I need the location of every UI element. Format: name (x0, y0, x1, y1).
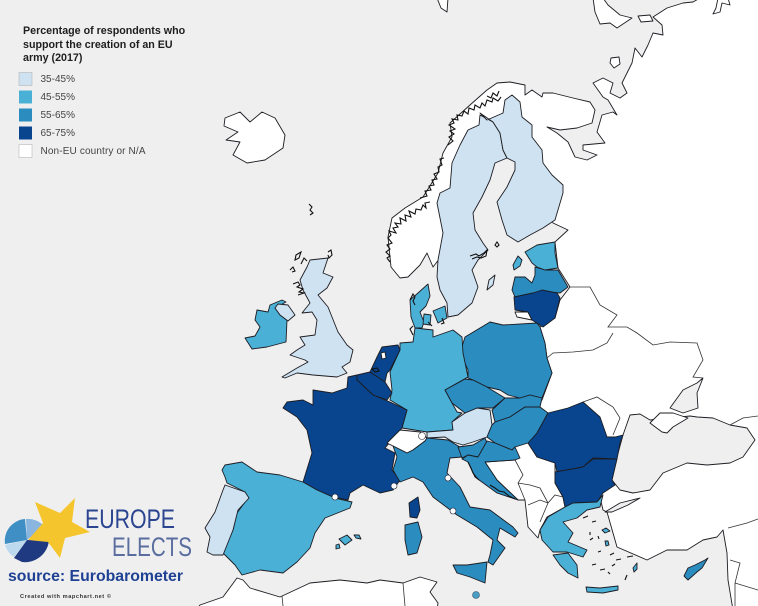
Sardinia (405, 522, 422, 555)
Cyprus (684, 558, 708, 580)
legend title: support the creation of an EU (23, 39, 173, 51)
legend swatch non-EU: Non-EU country or N/A (40, 146, 146, 157)
Poland (460, 322, 552, 398)
Spain (222, 462, 352, 575)
Greece (540, 495, 603, 557)
Gotland (487, 275, 495, 290)
Crete (586, 586, 618, 593)
France (283, 375, 407, 500)
Austria (427, 408, 492, 445)
logo pie chart (5, 519, 49, 562)
Sea of Marmara (605, 498, 640, 512)
Iceland (224, 112, 285, 163)
North Africa (196, 577, 438, 606)
Netherlands (370, 345, 400, 382)
legend swatch 45-55% (19, 90, 75, 104)
Hungary (487, 407, 548, 450)
Faroe and Shetland islands (309, 204, 332, 258)
Sicily (453, 562, 487, 583)
Germany (390, 328, 468, 432)
Kaliningrad (515, 312, 532, 320)
Estonian island (513, 256, 522, 270)
Romania (528, 402, 623, 472)
Finland (480, 95, 563, 242)
Europe Elects logo (5, 498, 192, 562)
Balkan borders (515, 460, 563, 522)
non-EU land: Norway, Russia, Belarus, Ukraine, Turkey (388, 0, 758, 606)
legend swatch 35-45%: 35-45% (40, 74, 75, 85)
Balearic Islands (336, 535, 361, 549)
Latvia (512, 267, 568, 297)
legend swatch 65-75%: 65-75% (40, 128, 75, 139)
mapchart credit: Created with mapchart.net © (20, 593, 112, 600)
Belgium (357, 372, 392, 400)
legend title: Percentage of respondents who (23, 25, 186, 37)
legend swatch 65-75% (19, 126, 75, 140)
North African borders (282, 583, 405, 606)
microstate dots (332, 432, 480, 598)
Crimea (650, 413, 688, 433)
Ireland (245, 300, 287, 349)
Northern Ireland (275, 304, 295, 321)
Croatia (462, 441, 520, 500)
legend swatch 55-65% (19, 108, 75, 122)
Slovenia (458, 438, 487, 458)
Sea of Azov (670, 378, 703, 413)
source line: source: Eurobarometer (8, 568, 183, 585)
Arctic islands (437, 0, 730, 68)
legend swatch 35-45% (19, 72, 75, 86)
Slovakia (492, 395, 542, 422)
Denmark (410, 284, 447, 328)
legend (19, 25, 186, 158)
Peloponnese (553, 553, 578, 578)
Czech Republic (445, 379, 505, 413)
Black Sea (612, 414, 755, 493)
logo wordmark ELECTS: ELECTS (112, 532, 192, 562)
legend title: army (2017) (23, 52, 83, 64)
IJsselmeer (381, 352, 386, 359)
eastern borders (547, 287, 758, 606)
logo star (28, 498, 90, 558)
Estonia (525, 242, 558, 270)
legend swatch 55-65%: 55-65% (40, 110, 75, 121)
jagged coastlines (290, 91, 515, 499)
logo wordmark EUROPE: EUROPE (85, 504, 175, 534)
Italy (393, 438, 518, 565)
Switzerland (387, 430, 427, 453)
map of Europe (196, 0, 758, 606)
Aegean islands (583, 516, 637, 580)
Bulgaria (555, 459, 617, 507)
United Kingdom (282, 258, 353, 378)
Balkans non-EU (485, 443, 565, 538)
legend swatch 45-55%: 45-55% (40, 92, 75, 103)
Portugal (205, 485, 249, 555)
Lithuania (514, 290, 560, 327)
Corsica (409, 497, 420, 518)
Sweden (437, 115, 507, 317)
